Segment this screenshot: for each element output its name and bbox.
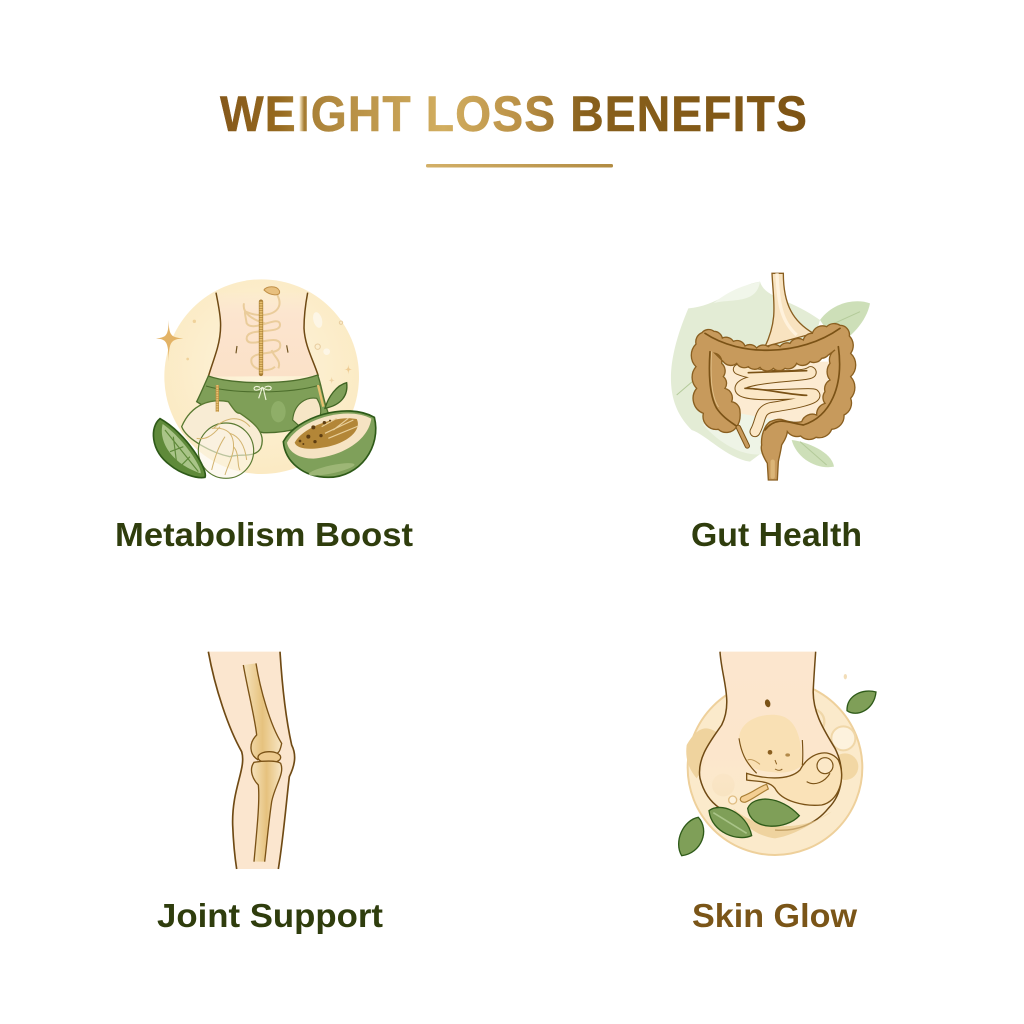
panel: gut health bbox=[671, 273, 870, 553]
icon: knee bbox=[208, 652, 295, 869]
small intestine bbox=[738, 369, 815, 432]
label: metabolism boost: Metabolism Boost bbox=[115, 516, 413, 553]
label: joint support: Joint Support bbox=[157, 897, 383, 934]
center fruit bbox=[182, 401, 262, 457]
digestive swirl bbox=[244, 295, 280, 370]
belly bbox=[699, 652, 841, 812]
halved fruit bbox=[283, 411, 376, 477]
panel: skin glow bbox=[679, 652, 876, 934]
shorts bbox=[197, 375, 328, 433]
icon: intestines bbox=[691, 324, 856, 480]
icon: background leaves bbox=[671, 273, 870, 467]
panel: joint support bbox=[157, 652, 383, 934]
baby-like form bbox=[739, 715, 802, 773]
label: gut health: Gut Health bbox=[691, 516, 862, 553]
lime slice bbox=[153, 419, 205, 478]
femur bbox=[243, 663, 282, 760]
intestine tube bbox=[747, 753, 842, 805]
colon bbox=[691, 324, 856, 480]
title: WEIGHT LOSS BENEFITS bbox=[220, 86, 808, 142]
label: skin glow: Skin Glow bbox=[692, 897, 857, 934]
leaves bbox=[748, 799, 799, 826]
body bbox=[208, 293, 318, 377]
title underline bbox=[426, 164, 613, 168]
back-right cream fruit bbox=[293, 398, 321, 427]
icon: belly with leaves bbox=[679, 652, 876, 856]
leaf bbox=[325, 383, 347, 408]
panel: metabolism boost bbox=[115, 279, 413, 553]
tibia bbox=[251, 761, 282, 862]
esophagus and stomach bbox=[765, 273, 813, 347]
icon: waist with fruits bbox=[153, 279, 376, 478]
